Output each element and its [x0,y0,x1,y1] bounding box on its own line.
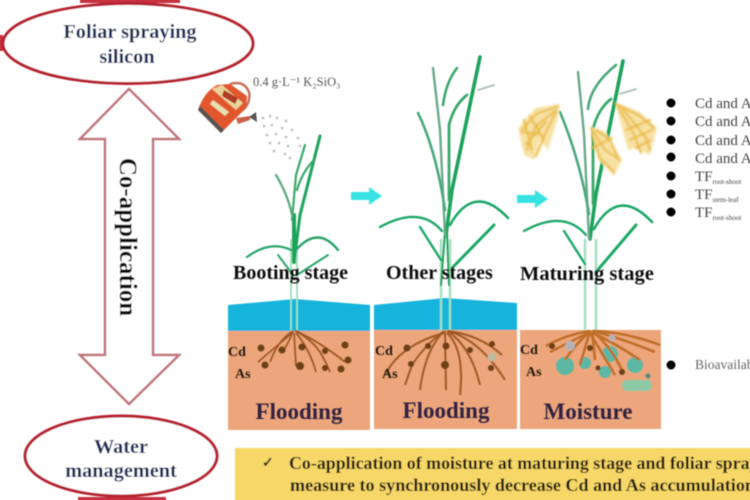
roots: maturing stage with teal mineral plaques [546,331,660,391]
water spray droplets [262,115,301,159]
callout: conclusion box: ✓ [262,456,274,471]
panel: other stages soil and water [374,298,517,429]
list: accumulation and translocation results: TF [695,169,713,185]
labels: Cd and As, other stages: As [382,367,398,382]
labels: Cd and As, booting stage: As [235,367,251,382]
heading: booting stage: Booting stage [233,262,348,284]
panel: foliar spraying silicon ellipse [0,0,253,84]
panel: maturing stage soil [520,330,661,429]
label: flooding one: Flooding [256,399,343,424]
plant: other stages rice [380,57,508,330]
labels: Cd and As, other stages: Cd [375,344,393,359]
panel: foliar spraying silicon ellipse: Foliar spraying [63,21,197,43]
labels: Cd and As, booting stage: Cd [228,345,246,360]
panel: booting stage soil and water [228,299,370,430]
list: accumulation and translocation results: stem-leaf [713,196,739,204]
panel: foliar spraying silicon ellipse: silicon [99,46,155,68]
list: accumulation and translocation results: root-shoot [713,178,741,186]
labels: Cd and As, maturing stage: As [526,365,542,380]
roots: other stages [385,331,505,395]
labels: Cd and As, booting stage [228,345,251,382]
labels: Cd and As, maturing stage [520,343,542,380]
icon: stage arrow two [517,190,548,208]
list: accumulation and translocation results: root-shoot [713,214,741,222]
label: flooding two: Flooding [403,398,490,423]
icon: stage arrow one [351,187,382,205]
heading: maturing stage: Maturing stage [520,263,654,285]
panel: water management ellipse: Water [94,436,148,458]
label: silicon concentration: 0.4 g·L⁻¹ K₂SiO₃ [253,75,340,89]
arrow: double-headed co-application: Co-application [114,158,141,316]
list: bioavailability result [666,357,750,372]
labels: Cd and As, other stages [375,344,398,382]
arrow: double-headed co-application [80,89,179,404]
panel: water management ellipse [25,416,217,500]
plant: booting stage rice [247,136,338,330]
panel: water management ellipse: management [65,460,177,482]
list: accumulation and translocation results: TF [695,187,713,203]
roots: booting stage [258,331,352,372]
label: moisture: Moisture [543,399,633,424]
icon: rice panicles [518,102,657,176]
plant: maturing stage rice [524,61,652,330]
list: accumulation and translocation results: TF [695,205,713,221]
labels: Cd and As, maturing stage: Cd [520,343,538,358]
list: accumulation and translocation results [666,96,750,222]
icon: watering can [198,83,257,133]
callout: conclusion box [235,448,750,500]
heading: other stages: Other stages [386,262,493,284]
